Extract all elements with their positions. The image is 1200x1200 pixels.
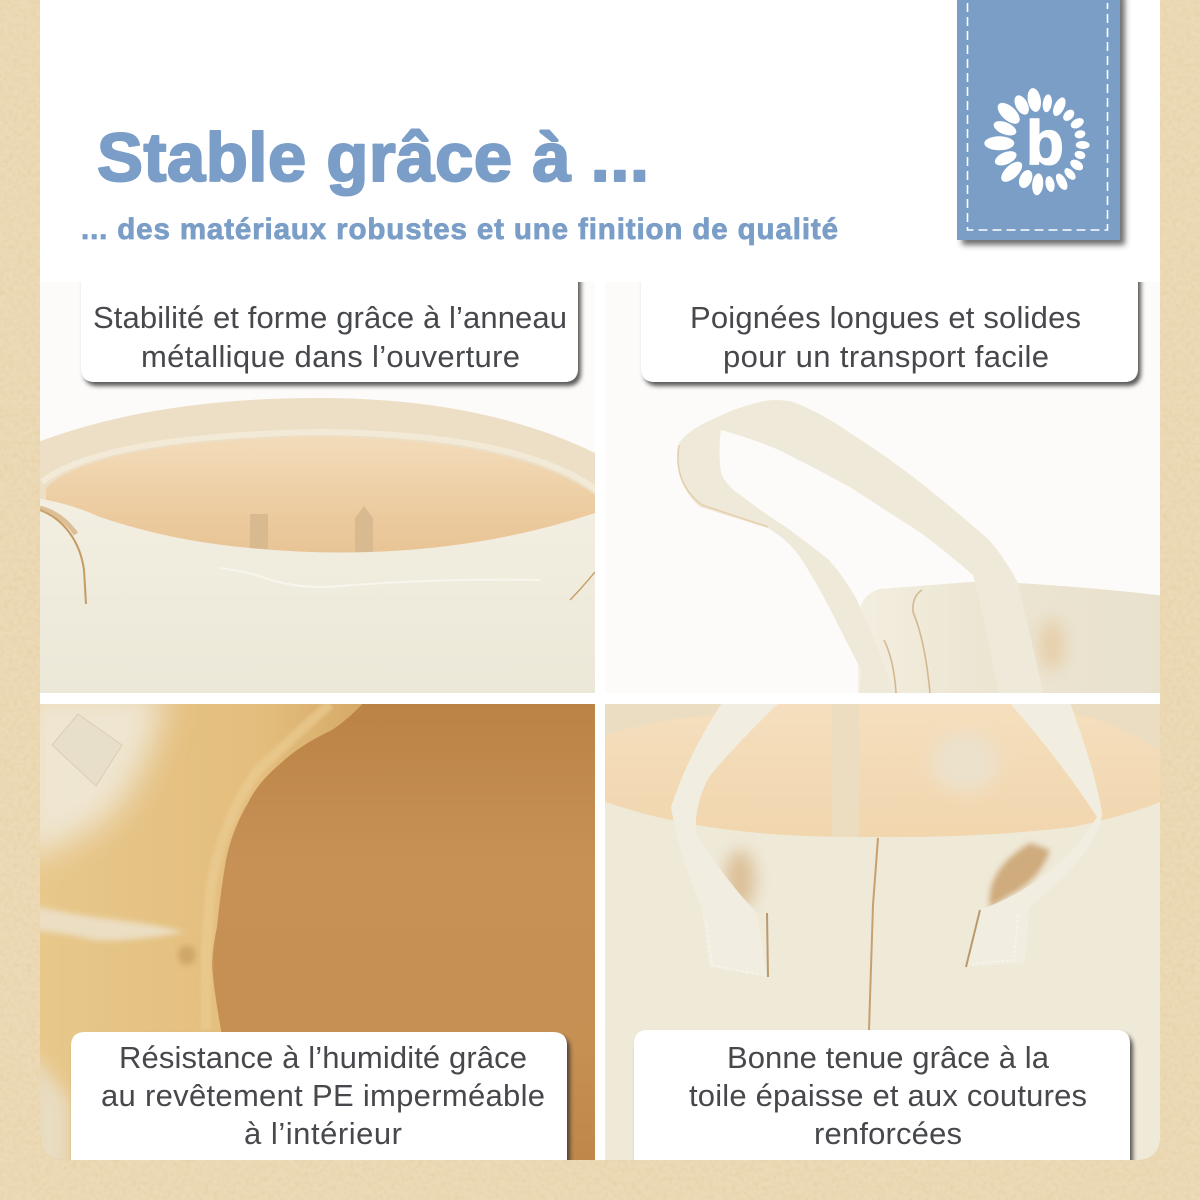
fold left xyxy=(40,510,86,604)
panel: metal ring xyxy=(30,270,605,700)
card: canvas text xyxy=(634,1030,1130,1175)
pale fold xyxy=(30,905,185,940)
basket rim xyxy=(40,398,595,500)
card: canvas text: renforcées xyxy=(814,1116,962,1151)
lower left pale xyxy=(40,1054,71,1160)
card: humidity text: au revêtement PE imperméable xyxy=(101,1078,545,1113)
title: Stable grâce à ... xyxy=(97,119,649,196)
bag folds xyxy=(884,590,930,693)
strap stitching and creases xyxy=(706,915,1018,975)
card: handles text xyxy=(641,270,1138,382)
bag body xyxy=(858,582,1165,700)
card: canvas text: toile épaisse et aux coutures xyxy=(689,1078,1087,1113)
seam highlights on front xyxy=(220,568,540,587)
lining edge highlight xyxy=(206,704,330,1030)
vertical inner strap xyxy=(832,704,859,837)
subtitle: ... des matériaux robustes et une finition de qualité xyxy=(81,213,838,246)
inner stitched band xyxy=(42,432,597,490)
interior rim right xyxy=(1070,704,1160,752)
reinforcement patch xyxy=(52,714,122,786)
warm shadow xyxy=(1040,619,1064,671)
inner strap marks xyxy=(250,506,373,556)
logo: flower with letter b: b xyxy=(1026,109,1064,178)
card: ring text: Stabilité et forme grâce à l’anneau xyxy=(93,300,567,335)
left strap xyxy=(671,700,782,977)
logo: flower with letter b xyxy=(984,87,1090,196)
pale highlight top left xyxy=(20,690,165,860)
card: handles text: Poignées longues et solides xyxy=(690,300,1081,335)
panel: reinforced canvas xyxy=(600,700,1165,1175)
card: canvas text: Bonne tenue grâce à la xyxy=(727,1040,1050,1075)
lining fabric xyxy=(30,700,366,1170)
interior rim left xyxy=(605,704,730,735)
basket interior xyxy=(46,436,595,565)
card: ring text: métallique dans l’ouverture xyxy=(141,339,520,374)
brand tag with logo xyxy=(957,0,1120,240)
handle loop xyxy=(678,400,1045,700)
card: ring text xyxy=(81,270,578,382)
pale patch interior xyxy=(931,732,999,792)
bag interior xyxy=(600,700,1165,837)
card: humidity text: Résistance à l’humidité grâce xyxy=(119,1040,527,1075)
fold right xyxy=(570,572,595,600)
card: handles text: pour un transport facile xyxy=(723,339,1049,374)
card: humidity text: à l’intérieur xyxy=(244,1116,402,1151)
basket front xyxy=(30,497,605,700)
right strap xyxy=(967,700,1102,967)
brown shadows xyxy=(725,850,755,910)
center seam xyxy=(869,838,878,1030)
knot shadow xyxy=(178,945,196,965)
handle seam xyxy=(678,445,768,527)
panel: waterproof lining xyxy=(20,690,595,1175)
panel: handles xyxy=(640,282,1160,693)
card: humidity text xyxy=(71,1032,567,1175)
